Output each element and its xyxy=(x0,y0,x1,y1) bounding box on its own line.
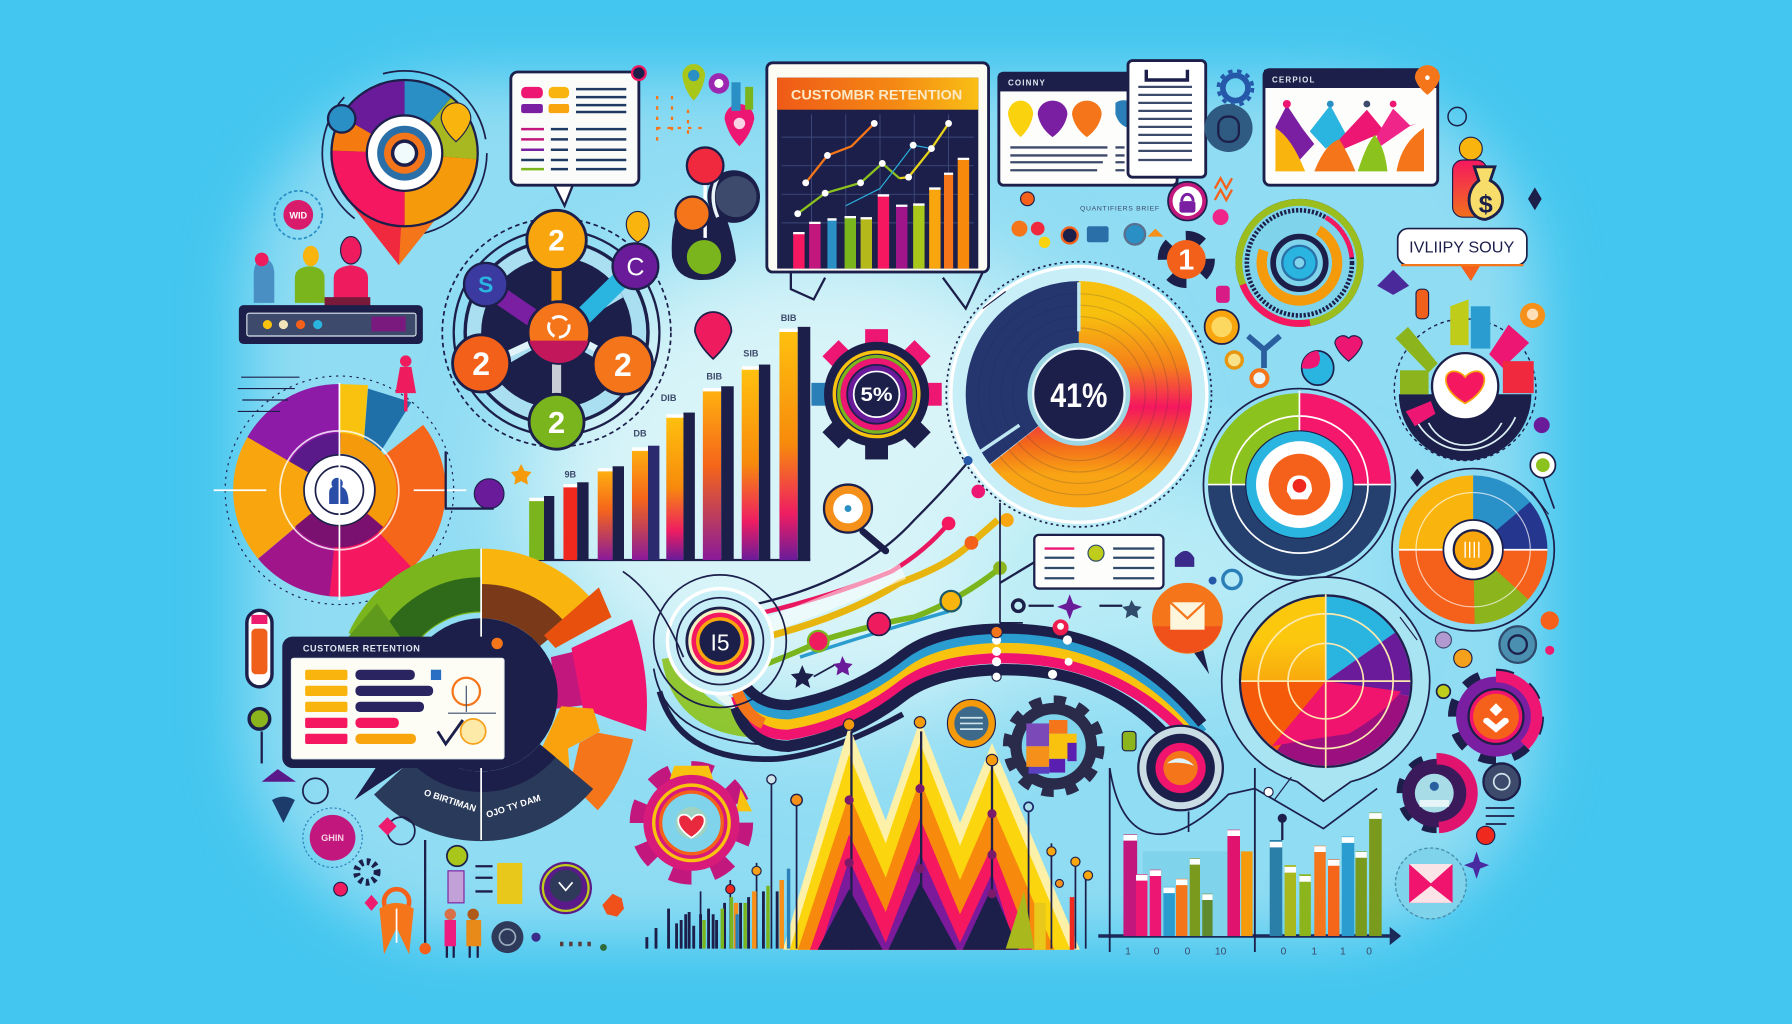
node: left upper: S xyxy=(478,272,493,298)
right bar chart: 10 xyxy=(1215,946,1227,957)
rising bar chart: BIB xyxy=(781,313,797,323)
lollipop marker row xyxy=(647,775,1093,950)
network hub diagram xyxy=(442,210,671,449)
right bar chart xyxy=(1098,768,1401,957)
podium with people xyxy=(239,237,423,344)
small pins and marks near screen xyxy=(657,64,754,146)
small donut chart xyxy=(1392,469,1554,631)
rising lines with nodes xyxy=(743,456,1023,669)
note card with speech tail xyxy=(511,66,646,206)
node: right upper xyxy=(613,211,658,289)
flowing rainbow ribbon xyxy=(654,619,1202,765)
small badge: pink circle: WID xyxy=(289,210,308,220)
node: right upper: C xyxy=(626,253,645,281)
small dark gear badge xyxy=(539,862,624,917)
number one gear badge: 1 xyxy=(1178,245,1194,277)
gear with heart xyxy=(638,766,752,877)
semicircle segmented donut xyxy=(320,534,647,856)
person with money bag icon: $ xyxy=(1479,191,1493,219)
right side gears and icons xyxy=(1435,611,1559,879)
decorative dark marks xyxy=(238,291,1549,800)
screen heading xyxy=(777,78,978,110)
small confetti row under card xyxy=(1011,178,1232,248)
lower green and pink donut xyxy=(1203,389,1395,581)
right bar chart: 0 xyxy=(1185,946,1191,957)
speech label: IVLIIPY SOUY xyxy=(1409,240,1515,257)
rising bar chart xyxy=(529,313,810,560)
small icons beside donut xyxy=(1205,270,1409,386)
mountain peak pins xyxy=(843,717,998,898)
pill gauge xyxy=(247,610,272,763)
right bar chart: 0 xyxy=(1366,946,1372,957)
node fifteen ring: I5 xyxy=(710,629,730,655)
semicircle segmented donut: OJO TY DAM xyxy=(485,793,542,820)
rising bar chart: DIB xyxy=(661,393,677,403)
envelope badge xyxy=(1395,848,1466,919)
pink bubble and small left icons xyxy=(262,769,415,911)
bottom left figures and badges xyxy=(419,840,607,958)
dark gear with lens xyxy=(1400,757,1473,830)
node: bottom xyxy=(529,394,584,449)
small marks between charts xyxy=(1013,551,1241,619)
customer retention screen xyxy=(767,63,989,309)
small confetti row under card: QUANTIFIERS BRIEF xyxy=(1080,205,1160,212)
red map pin xyxy=(695,312,731,359)
lock badge xyxy=(1168,182,1207,221)
rising bar chart: 9B xyxy=(564,470,577,480)
small badge: pink circle xyxy=(274,191,322,239)
right bar chart: 0 xyxy=(1281,946,1287,957)
small red peg xyxy=(395,355,416,411)
purple bead and star xyxy=(474,464,531,509)
pink bubble and small left icons: GHIN xyxy=(321,833,344,843)
lollipop marker xyxy=(1410,417,1555,509)
small info card xyxy=(1000,535,1163,589)
node: center xyxy=(528,302,590,363)
gear with color mosaic xyxy=(1008,701,1099,792)
rising bar chart: DB xyxy=(633,429,647,439)
node: top xyxy=(527,210,586,270)
rising bar chart: SIB xyxy=(743,349,759,359)
person with money bag icon xyxy=(1448,107,1542,219)
rising bar chart: BIB xyxy=(706,371,723,381)
number one gear badge xyxy=(1163,237,1209,282)
magnifier xyxy=(824,485,886,551)
concentric ring chart xyxy=(1228,191,1371,335)
mail bubble xyxy=(1152,583,1223,674)
layered mountain chart xyxy=(783,728,1080,950)
screen line chart xyxy=(794,120,952,217)
node: right xyxy=(593,335,653,394)
big donut chart 41 percent: 41% xyxy=(1050,377,1107,415)
pie chart in speech outline xyxy=(1222,577,1430,801)
percent gear xyxy=(811,329,942,459)
big donut chart 41 percent xyxy=(946,262,1211,527)
left donut chart xyxy=(214,376,466,605)
traffic light nodes xyxy=(672,147,760,280)
gear and dark blob icon xyxy=(1205,71,1253,152)
screen heading: CUSTOMBR RETENTION xyxy=(791,87,962,102)
node: bottom: 2 xyxy=(548,405,565,440)
pin donut chart xyxy=(322,71,487,265)
clipboard xyxy=(1128,61,1206,177)
fan chart with heart xyxy=(1394,289,1545,461)
light background glow xyxy=(246,80,1537,937)
purple gear with heart xyxy=(1453,673,1539,760)
mountain chart card xyxy=(1264,65,1440,185)
node: left: 2 xyxy=(472,346,490,382)
orange fan tree icon xyxy=(379,889,414,954)
right bar chart: 1 xyxy=(1125,946,1131,957)
small badges near ribbon xyxy=(947,699,1136,751)
screen bars xyxy=(793,159,969,269)
right bar chart: 1 xyxy=(1311,946,1317,957)
mountain chart card: CERPIOL xyxy=(1272,75,1316,84)
card with pins xyxy=(999,73,1177,185)
percent gear: 5% xyxy=(861,384,893,406)
card with pins: COINNY xyxy=(1008,79,1046,88)
node: top: 2 xyxy=(548,224,565,257)
node: left xyxy=(453,335,510,392)
node: left upper xyxy=(464,263,507,306)
node fifteen ring xyxy=(654,575,786,707)
ribbon end ring xyxy=(1138,726,1223,832)
node: right: 2 xyxy=(614,347,632,383)
retention list card: CUSTOMER RETENTION xyxy=(303,643,420,653)
right bar chart: 0 xyxy=(1154,946,1160,957)
right bar chart: 1 xyxy=(1340,946,1346,957)
retention list card xyxy=(282,637,512,800)
semicircle segmented donut: O BIRTIMAN xyxy=(423,787,477,814)
speech label xyxy=(1398,229,1527,281)
